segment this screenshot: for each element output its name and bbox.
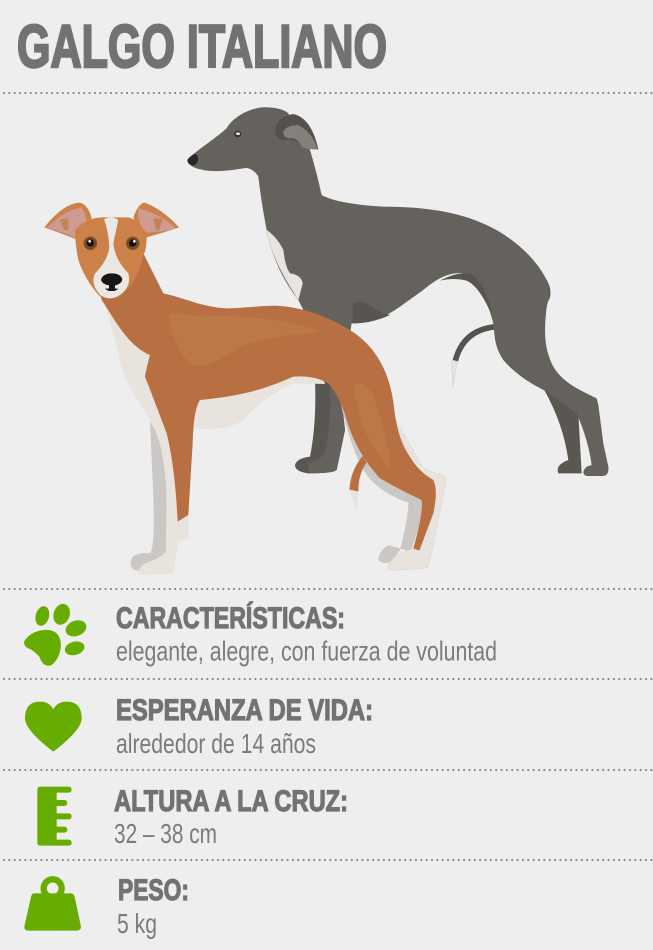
row: altura a la cruz [37,785,348,849]
shoulder highlight [168,314,323,366]
head [75,217,147,297]
white hind foot [388,418,446,570]
title: GALGO ITALIANO [17,13,387,80]
tail [349,456,367,492]
text: elegante, alegre, con fuerza de voluntad [116,636,497,666]
illustration: tan dog [44,203,446,575]
text: 32 – 38 cm [114,818,217,849]
icon: ruler [37,787,72,846]
illustration: grey dog [187,107,608,476]
heading: PESO: [118,874,189,907]
row: esperanza de vida [25,694,373,759]
far front leg [131,422,167,571]
body [93,253,436,551]
nose [187,154,198,166]
heading: ESPERANZA DE VIDA: [116,694,373,727]
icon: paw [24,602,89,666]
row: peso [24,874,189,939]
white chest and front leg [105,303,200,575]
text: alrededor de 14 años [116,728,316,759]
white belly [195,370,325,429]
icon: weight [24,879,81,931]
nose [101,273,122,291]
heading: ALTURA A LA CRUZ: [114,785,348,818]
far hind leg [340,400,424,563]
heading: CARACTERÍSTICAS: [116,601,345,635]
text: 5 kg [117,908,157,939]
left ear [44,203,92,239]
right ear [133,203,179,237]
row: características [24,601,497,666]
blaze and muzzle [93,217,129,298]
eyes [84,237,97,250]
hip highlight [355,383,391,470]
eye [234,131,241,137]
icon: heart [25,702,82,752]
ear [275,114,318,149]
